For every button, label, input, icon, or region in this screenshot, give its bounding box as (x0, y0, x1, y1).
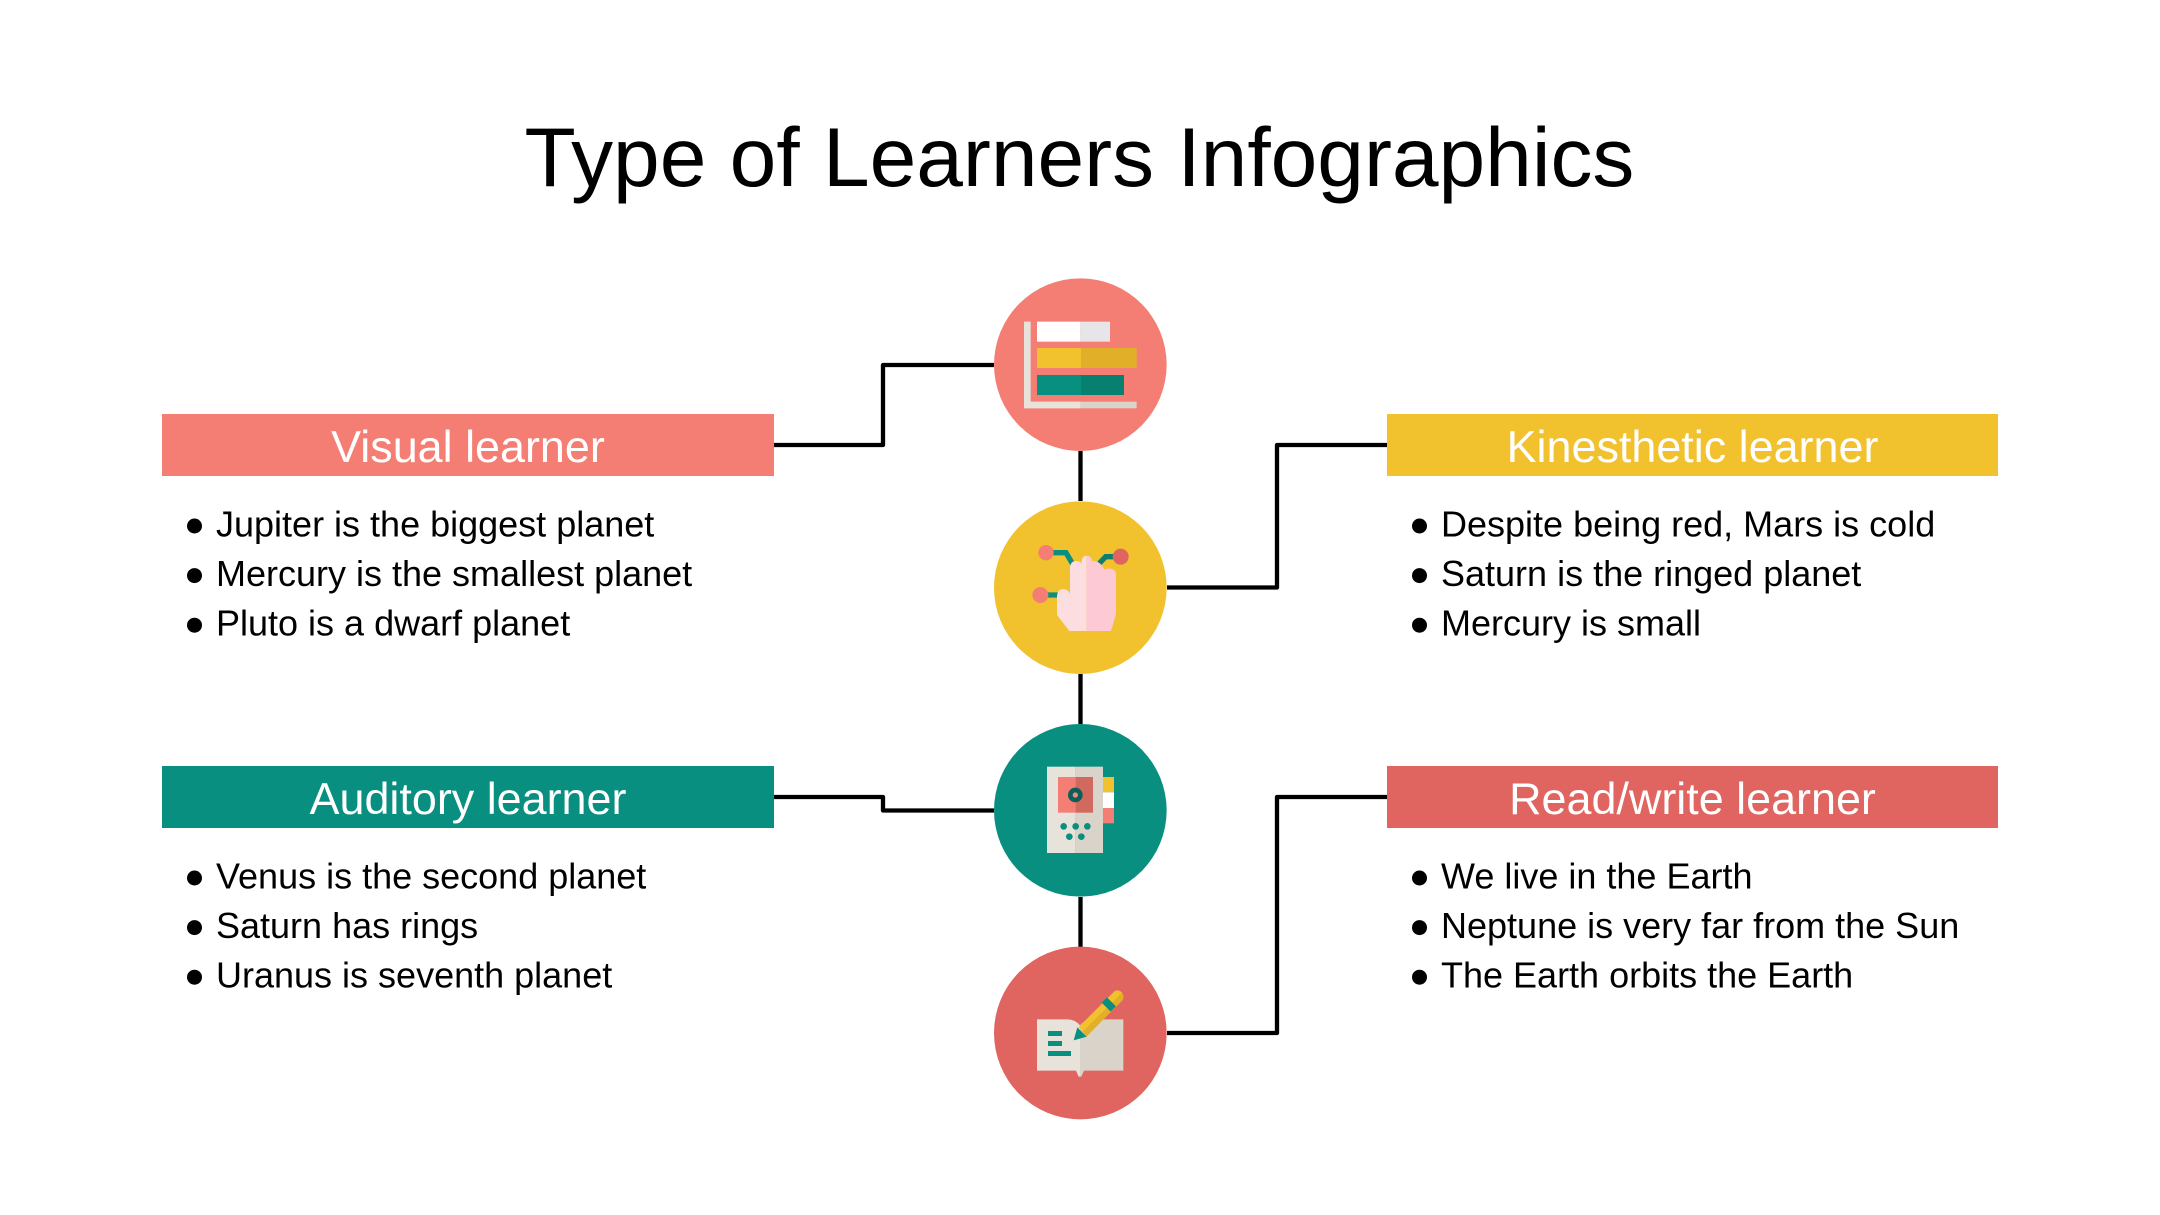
list: read/write learner: The Earth orbits the Earth (1441, 955, 1853, 996)
heading: read/write learner: Read/write learner (1509, 773, 1876, 824)
list: visual learner: Jupiter is the biggest planet (216, 503, 654, 544)
panel: visual learner (162, 414, 774, 644)
list: kinesthetic learner: Saturn is the ringed planet (1441, 553, 1861, 594)
list: visual learner (187, 503, 692, 644)
connector lines (774, 365, 1387, 1033)
list: auditory learner: Uranus is seventh planet (216, 955, 612, 996)
icon: bar chart in salmon circle (994, 278, 1167, 451)
panel: kinesthetic learner (1387, 414, 1998, 644)
list: visual learner: Mercury is the smallest planet (216, 553, 692, 594)
heading: kinesthetic learner: Kinesthetic learner (1507, 421, 1878, 472)
icon: hand in yellow circle (994, 501, 1167, 674)
heading: auditory learner: Auditory learner (310, 773, 626, 824)
icon: book and pencil in red circle (994, 947, 1167, 1119)
list: kinesthetic learner (1412, 503, 1935, 644)
heading: kinesthetic learner (1387, 414, 1998, 476)
list: auditory learner: Saturn has rings (216, 905, 478, 946)
heading: visual learner: Visual learner (331, 421, 605, 472)
list: kinesthetic learner: Despite being red, Mars is cold (1441, 503, 1935, 544)
icon: audio recorder in teal circle (994, 724, 1167, 897)
heading: read/write learner (1387, 766, 1998, 828)
heading: visual learner (162, 414, 774, 476)
panel: read/write learner (1387, 766, 1998, 996)
list: kinesthetic learner: Mercury is small (1441, 603, 1701, 644)
heading: auditory learner (162, 766, 774, 828)
list: read/write learner: We live in the Earth (1441, 855, 1752, 896)
list: auditory learner (187, 855, 646, 996)
panel: auditory learner (162, 766, 774, 996)
title: Type of Learners Infographics (524, 110, 1634, 204)
list: visual learner: Pluto is a dwarf planet (216, 603, 570, 644)
list: read/write learner (1412, 855, 1959, 996)
list: auditory learner: Venus is the second planet (216, 855, 646, 896)
list: read/write learner: Neptune is very far from the Sun (1441, 905, 1959, 946)
